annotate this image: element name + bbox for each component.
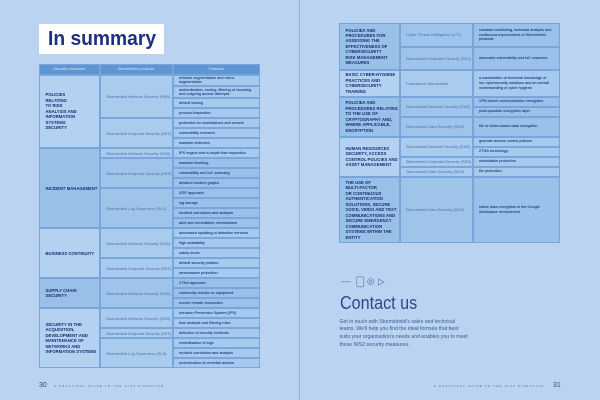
section: incident management: Stormshield Network Security (SNS) (106, 151, 170, 156)
section: cryptography: Stormshield Data Security (SDS) (406, 124, 464, 129)
section: human resources security: ASSET MANAGEMENT (346, 162, 392, 167)
table header: Features (209, 66, 224, 71)
section: multi-factor authentication: ENTITY (346, 235, 361, 240)
section: cryptography: Stormshield Network Security (SNS) (406, 104, 470, 109)
table header: Security measures (53, 66, 85, 71)
section: cyber hygiene training: our cybersecurity solutions and an overall (479, 81, 549, 85)
section: human resources security: ZTNA technology (479, 149, 508, 153)
section: supply chain security: ZTNA approach (179, 281, 206, 285)
contact icons (341, 276, 374, 288)
section: multi-factor authentication: SOLUTIONS, SECURE (346, 202, 390, 207)
section: supply chain security: Stormshield Network Security (SNS) (106, 291, 170, 296)
section: business continuity: safety mode (179, 251, 200, 255)
section: cryptography: WHERE APPLICABLE, (346, 122, 391, 127)
section: policies on risk analysis: vulnerability research (179, 131, 215, 135)
section: multi-factor authentication: SYSTEMS WITHIN THE (346, 229, 392, 234)
section: assessing effectiveness: POLICIES AND (346, 28, 376, 33)
section: cyber hygiene training: CYBERSECURITY (346, 83, 382, 88)
section: business continuity: automated updating of detection services (179, 231, 248, 235)
section: multi-factor authentication: COMMUNICATIONS AND (346, 213, 395, 218)
section: multi-factor authentication: SECURE EMERGENCY (346, 218, 392, 223)
section: cyber hygiene training: BASIC CYBER-HYGIENE (346, 72, 395, 77)
section: policies on risk analysis: protocol inspection (179, 111, 211, 115)
section: security in acquisition: centralisation of logs (179, 341, 214, 345)
section: multi-factor authentication: OR CONTINUOUS (346, 191, 381, 196)
section: cyber hygiene training: TRAINING (346, 89, 366, 94)
contact paragraph: teams. We'll help you find the ideal formula that best (340, 326, 458, 332)
section: policies on risk analysis: POLICIES (46, 92, 65, 97)
section: policies on risk analysis: SYSTEMS (46, 120, 66, 125)
section: cryptography: PROCEDURES RELATING (346, 106, 398, 111)
section: security in acquisition: INFORMATION SYSTEMS (46, 349, 96, 354)
section: supply chain security: SECURITY (46, 293, 67, 298)
section: policies on risk analysis: authentication, routing, filtering of incoming (179, 88, 251, 92)
section: incident management: XDR approach (179, 191, 204, 195)
section: cyber hygiene training: understanding of cyber hygiene (479, 86, 532, 90)
section: incident management: detailed incident graphs (179, 181, 219, 185)
section: policies on risk analysis: Stormshield Network Security (SNS) (106, 94, 170, 99)
section: security in acquisition: ACQUISITION, (46, 327, 74, 332)
section: human resources security: CONTROL POLICIES AND (346, 157, 398, 162)
section: assessing effectiveness: constant monitoring, technical analysis and (479, 28, 551, 32)
section: policies on risk analysis: Stormshield Endpoint Security (SES) (106, 131, 171, 136)
section: security in acquisition: orchestration of remedial actions (179, 361, 234, 365)
section: security in acquisition: Intrusion Prevention System (IPS) (179, 311, 236, 315)
contact paragraph: suits your organisation's needs and enables you to meet (340, 334, 468, 340)
section: multi-factor authentication: VOICE, VIDEO AND TEXT (346, 207, 396, 212)
table: security measures, left page (39, 64, 260, 368)
section: human resources security (339, 137, 560, 177)
contact paragraph (340, 318, 468, 348)
table header: Stormshield products (118, 66, 154, 71)
section: human resources security: file protection (479, 169, 502, 173)
section: multi-factor authentication (339, 177, 560, 243)
section: incident management (39, 148, 260, 228)
section: incident management: Stormshield Endpoint Security (SES) (106, 171, 171, 176)
section: incident management: log storage (179, 201, 198, 205)
section: policies on risk analysis: SECURITY (46, 125, 67, 130)
section: business continuity: ransomware protection (179, 271, 218, 275)
section: assessing effectiveness: PROCEDURES FOR (346, 33, 385, 38)
section: assessing effectiveness: products (479, 37, 494, 41)
section: incident management: vulnerability and IoC scanning (179, 171, 230, 175)
section: incident management: INCIDENT MANAGEMENT (46, 186, 97, 191)
section: policies on risk analysis (39, 75, 260, 148)
section: security in acquisition: NETWORKS AND (46, 344, 80, 349)
section: assessing effectiveness: CYBERSECURITY (346, 49, 382, 54)
section: business continuity: default security policies (179, 261, 218, 265)
section: security in acquisition: DEVELOPMENT AND (46, 333, 88, 338)
table header (39, 64, 260, 75)
section: security in acquisition: SECURITY IN THE (46, 322, 82, 327)
icon: dash (341, 281, 351, 283)
section: multi-factor authentication: Stormshield Data Security (SDS) (406, 207, 464, 212)
section: supply chain security (39, 278, 260, 308)
page number 31: 31 (553, 382, 561, 388)
section: security in acquisition: flow analysis and filtering rules (179, 321, 230, 325)
section: security in acquisition: Stormshield Network Security (SNS) (106, 316, 170, 321)
section: assessing effectiveness: RISK MANAGEMENT (346, 55, 388, 60)
section: cyber hygiene training: a combination of technical knowledge of (479, 76, 546, 80)
section: multi-factor authentication: COMMUNICATION (346, 224, 382, 229)
section: cryptography: post-quantum encryption layer (479, 109, 530, 113)
section: incident management: Stormshield Log Supervisor (SLS) (106, 206, 166, 211)
section: cryptography: VPN tunnel communication encryption (479, 99, 543, 103)
section: security in acquisition: Stormshield Log Supervisor (SLS) (106, 351, 166, 356)
section: business continuity: Stormshield Network Security (SNS) (106, 241, 170, 246)
section: assessing effectiveness: ASSESSING THE (346, 38, 380, 43)
section: supply chain security: secure remote connection (179, 301, 223, 305)
section: cryptography: POLICIES AND (346, 100, 376, 105)
section: policies on risk analysis: malware detection (179, 141, 210, 145)
section: policies on risk analysis: segmentation (179, 80, 202, 84)
heading: Contact us: Contact us (340, 292, 417, 313)
section: cryptography: TO THE USE OF (346, 111, 378, 116)
section: cryptography (339, 97, 560, 137)
section: policies on risk analysis: protection for workstations and servers (179, 121, 244, 125)
table: security measures, right page (339, 23, 560, 243)
section: multi-factor authentication: native data encryption in the Google (479, 205, 540, 209)
icon: phone (357, 277, 364, 287)
page number 30: 30 (39, 382, 47, 388)
section: business continuity: BUSINESS CONTINUITY (46, 251, 94, 256)
section: assessing effectiveness: EFFECTIVENESS OF (346, 44, 387, 49)
section: cryptography: file or folder-based data encryption (479, 124, 537, 128)
section: policies on risk analysis: RELATING (46, 98, 67, 103)
section: cyber hygiene training: PRACTICES AND (346, 78, 380, 83)
section: security in acquisition: detection of security incidents (179, 331, 229, 335)
section: security in acquisition: incident correlation and analysis (179, 351, 233, 355)
contact paragraph: these NIS2 security measures. (340, 342, 410, 348)
footer: left page (39, 382, 164, 388)
running footer text: A PRACTICAL GUIDE TO THE NIS2 DIRECTIVE (54, 384, 164, 388)
section: policies on risk analysis: TO RISK (46, 103, 63, 108)
section: incident management: malware blocking (179, 161, 208, 165)
contact paragraph: Get in touch with Stormshield's sales and technical (340, 318, 455, 324)
title: In summary (39, 24, 164, 54)
section: policies on risk analysis: INFORMATION (46, 114, 75, 119)
section: assessing effectiveness: MEASURES (346, 60, 369, 65)
section: human resources security: workstation protection (479, 159, 516, 163)
section: assessing effectiveness: Cyber Threat Intelligence (CTI) (406, 32, 461, 37)
running footer text: A PRACTICAL GUIDE TO THE NIS2 DIRECTIVE (434, 384, 544, 388)
section: human resources security: Stormshield Data Security (SDS) (406, 169, 464, 174)
section: policies on risk analysis: and outgoing access attempts (179, 92, 229, 96)
section: multi-factor authentication: Workspace environment (479, 210, 520, 214)
section: human resources security: granular access control policies (479, 139, 532, 143)
section: incident management: alert and remediation mechanisms (179, 221, 237, 225)
section: business continuity: high availability (179, 241, 205, 245)
section: human resources security: SECURITY, ACCESS (346, 151, 386, 156)
section: supply chain security: SUPPLY CHAIN (46, 288, 77, 293)
section: supply chain security: conformity checks on equipment (179, 291, 233, 295)
section: cyber hygiene training: Formations Stormshield (406, 81, 448, 86)
section: policies on risk analysis: ANALYSIS AND (46, 109, 77, 114)
section: cyber hygiene training (339, 70, 560, 97)
icon: play (378, 278, 384, 286)
section: assessing effectiveness: continuous improvement of Stormshield (479, 33, 546, 37)
section: human resources security: Stormshield Network Security (SNS) (406, 144, 470, 149)
icon: at sign (368, 278, 374, 285)
section: security in acquisition (39, 308, 260, 368)
section: multi-factor authentication: THE USE OF (346, 180, 371, 185)
section: incident management: incident correlation and analysis (179, 211, 233, 215)
footer: right page (434, 382, 561, 388)
section: assessing effectiveness (339, 23, 560, 70)
section: multi-factor authentication: MULTI-FACTOR (346, 185, 377, 190)
title: In summary: In summary (48, 26, 156, 50)
section: multi-factor authentication: AUTHENTICATION (346, 196, 383, 201)
section: human resources security: HUMAN RESOURCES (346, 146, 389, 151)
page gutter (299, 0, 300, 400)
section: business continuity (39, 228, 260, 278)
section: security in acquisition: Stormshield Endpoint Security (SES) (106, 331, 171, 336)
section: cryptography: ENCRYPTION (346, 128, 373, 133)
section: incident management: IPS engine and in-depth flow inspection (179, 151, 246, 155)
section: human resources security: Stormshield Endpoint Security (SES) (406, 159, 471, 164)
section: assessing effectiveness: Stormshield Endpoint Security (SES) (406, 56, 471, 61)
section: business continuity: Stormshield Endpoint Security (SES) (106, 266, 171, 271)
section: security in acquisition: MAINTENANCE OF (46, 338, 84, 343)
section: policies on risk analysis: default locking (179, 101, 203, 105)
section: cryptography: CRYPTOGRAPHY AND, (346, 117, 392, 122)
section: policies on risk analysis: network segmentation and micro- (179, 76, 235, 80)
section: assessing effectiveness: automatic vulnerability and IoC searches (479, 56, 547, 60)
